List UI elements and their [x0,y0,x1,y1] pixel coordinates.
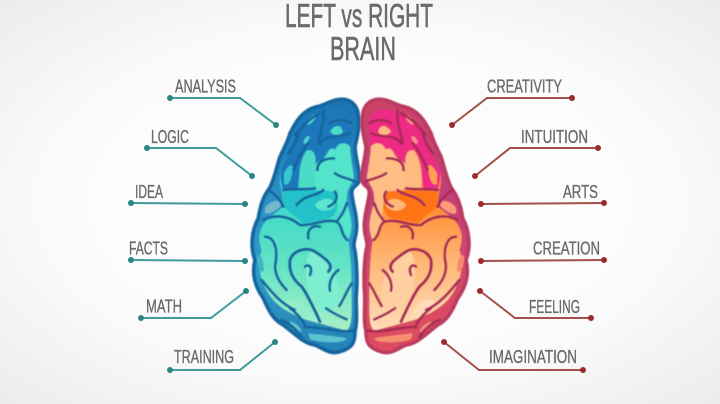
sulci [366,110,459,337]
left brain hemisphere [252,99,359,353]
callout: feeling: FEELING [529,297,580,317]
callout: idea: IDEA [135,182,163,202]
callout: intuition: INTUITION [521,127,588,147]
callout: idea [128,182,248,207]
callout: intuition [472,127,601,179]
callout: analysis [167,76,279,128]
callout: imagination: IMAGINATION [489,347,577,367]
sulci [262,110,355,337]
title: BRAIN [330,30,396,67]
callout: creation [478,238,607,264]
callout: facts [128,238,248,264]
right brain hemisphere [362,99,469,353]
callout: arts: ARTS [563,182,598,202]
callout: math: MATH [146,296,182,316]
callout: training: TRAINING [174,347,234,367]
callout: creativity: CREATIVITY [487,76,562,96]
callout: creation: CREATION [533,238,600,258]
callout: arts [478,182,607,207]
callout: logic: LOGIC [151,127,189,147]
callout: math [138,288,249,321]
callout: logic [144,127,255,179]
callout: feeling [477,288,594,321]
callout: analysis: ANALYSIS [175,76,236,96]
callout: training [167,339,278,373]
title [285,0,433,67]
callout: imagination [441,339,586,373]
callout: facts: FACTS [129,238,168,258]
callout: creativity [449,76,575,128]
